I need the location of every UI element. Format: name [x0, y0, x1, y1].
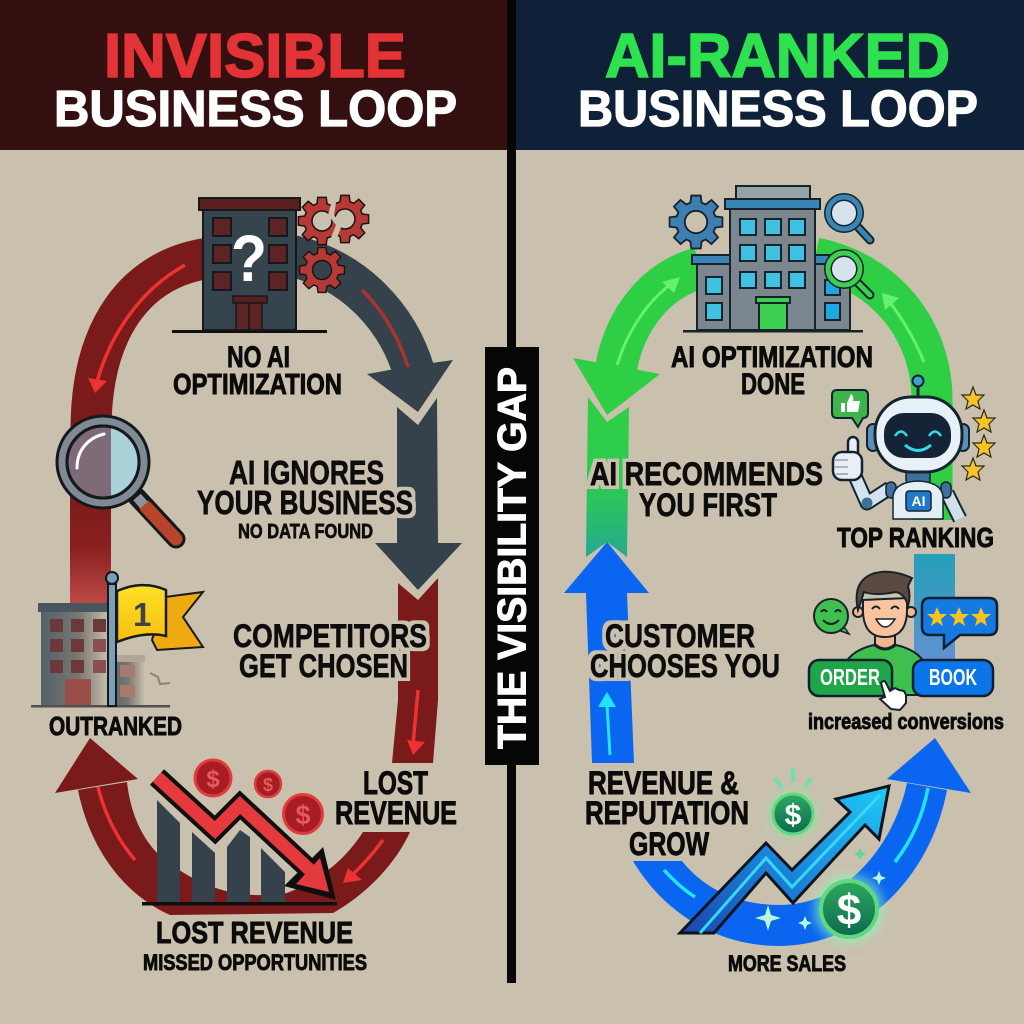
heading: ai-ranked: AI-RANKED — [605, 22, 950, 91]
arrow: dark arc top right — [292, 256, 453, 412]
text: no ai optimization: OPTIMIZATION — [173, 369, 342, 401]
icon: smile bubble — [814, 599, 849, 634]
icon: broken building — [172, 198, 327, 333]
text: revenue and reputation grow: GROW — [629, 826, 710, 862]
icon: gear blue — [670, 196, 722, 248]
icon: lost coins: $ — [206, 766, 220, 793]
button: order: ORDER — [820, 664, 880, 690]
arrow: red bottom arc — [55, 738, 410, 915]
icon: broken gears — [298, 195, 369, 292]
text: revenue and reputation grow: REPUTATION — [585, 795, 749, 831]
arrow: green arc top left — [573, 268, 700, 415]
arrow: green straight — [586, 397, 629, 557]
icon: blue magnifier — [828, 197, 870, 240]
icon: robot: AI — [912, 493, 926, 509]
icon: small dollar coin: $ — [785, 799, 802, 832]
icon: large dollar coin: $ — [837, 886, 861, 935]
arrow: dark straight — [375, 398, 462, 590]
text: lost revenue missed opportunities — [143, 915, 367, 975]
chart: growth arrow — [680, 786, 889, 933]
icon: outranked building with flag — [31, 572, 203, 708]
panel: ranked loop arrows — [564, 258, 971, 946]
text: ai ignores your business — [197, 454, 413, 543]
button: order — [809, 660, 892, 696]
text: ai recommends you first — [590, 456, 823, 523]
text: more sales: MORE SALES — [728, 951, 846, 976]
icon: pointer hand — [880, 681, 906, 710]
button: book — [913, 660, 993, 696]
arrow: blue upright — [564, 542, 649, 763]
icon: sparkles — [755, 848, 886, 931]
icon: review bubble — [922, 598, 997, 648]
icon: smiling customer — [845, 572, 925, 695]
text: ai recommends you first: YOU FIRST — [639, 487, 777, 523]
text: customer chooses you: CHOOSES YOU — [590, 648, 780, 684]
center divider — [507, 0, 516, 983]
icon: small dollar coin — [769, 768, 817, 838]
icon: optimized building — [683, 186, 863, 332]
icon: green magnifier — [828, 253, 870, 295]
arrow: red arc top left — [70, 258, 210, 610]
text: no ai optimization: NO AI — [227, 341, 290, 374]
text: lost revenue right: LOST — [363, 765, 428, 801]
label: the visibility gap: THE VISIBILITY GAP — [490, 367, 534, 749]
icon: robot — [833, 376, 969, 519]
text: lost revenue right: REVENUE — [335, 795, 457, 831]
panel: right header — [516, 0, 1024, 150]
icon: broken building: ? — [231, 221, 267, 295]
icon: outranked building with flag: 1 — [133, 596, 151, 633]
chart: falling revenue bars and arrow — [142, 777, 337, 906]
text: ai ignores your business: AI IGNORES — [229, 454, 384, 491]
panel: left header — [0, 0, 508, 150]
text: competitors get chosen — [233, 618, 427, 684]
panel: invisible loop arrows — [55, 256, 462, 915]
text: customer chooses you — [590, 618, 780, 684]
button: book: BOOK — [929, 664, 977, 690]
icon: rating stars — [962, 387, 995, 480]
text: outranked: OUTRANKED — [49, 711, 182, 741]
heading: business loop right: BUSINESS LOOP — [578, 80, 978, 137]
icon: magnifying glass — [57, 416, 176, 539]
text: ai optimization done — [671, 341, 873, 401]
arrow: teal straight — [914, 554, 955, 660]
icon: thumbs up bubble — [832, 390, 868, 427]
icon: lost coins: $ — [263, 775, 273, 795]
text: ai ignores your business: YOUR BUSINESS — [197, 484, 413, 521]
text: competitors get chosen: GET CHOSEN — [239, 648, 408, 684]
arrow: red straight — [392, 578, 438, 763]
heading: business loop left: BUSINESS LOOP — [54, 80, 457, 137]
text: ai optimization done: AI OPTIMIZATION — [671, 341, 873, 374]
text: no ai optimization — [173, 341, 342, 401]
icon: large dollar coin — [814, 874, 884, 944]
heading: invisible: INVISIBLE — [104, 22, 406, 91]
text: lost revenue missed opportunities: MISSED OPPORTUNITIES — [143, 950, 367, 975]
text: customer chooses you: CUSTOMER — [605, 618, 755, 654]
text: revenue and reputation grow — [585, 765, 749, 862]
text: lost revenue missed opportunities: LOST REVENUE — [156, 915, 353, 950]
text: competitors get chosen: COMPETITORS — [233, 618, 427, 654]
arrow: blue bottom arc — [633, 738, 971, 946]
text: ai recommends you first: AI RECOMMENDS — [590, 456, 823, 492]
text: revenue and reputation grow: REVENUE & — [588, 765, 739, 801]
icon: lost coins: $ — [295, 800, 311, 830]
arrow: green arc right — [815, 258, 932, 520]
text: ai optimization done: DONE — [741, 368, 805, 401]
text: lost revenue right — [335, 765, 457, 831]
text: ai ignores your business: NO DATA FOUND — [238, 521, 373, 543]
icon: lost coins — [195, 760, 322, 834]
